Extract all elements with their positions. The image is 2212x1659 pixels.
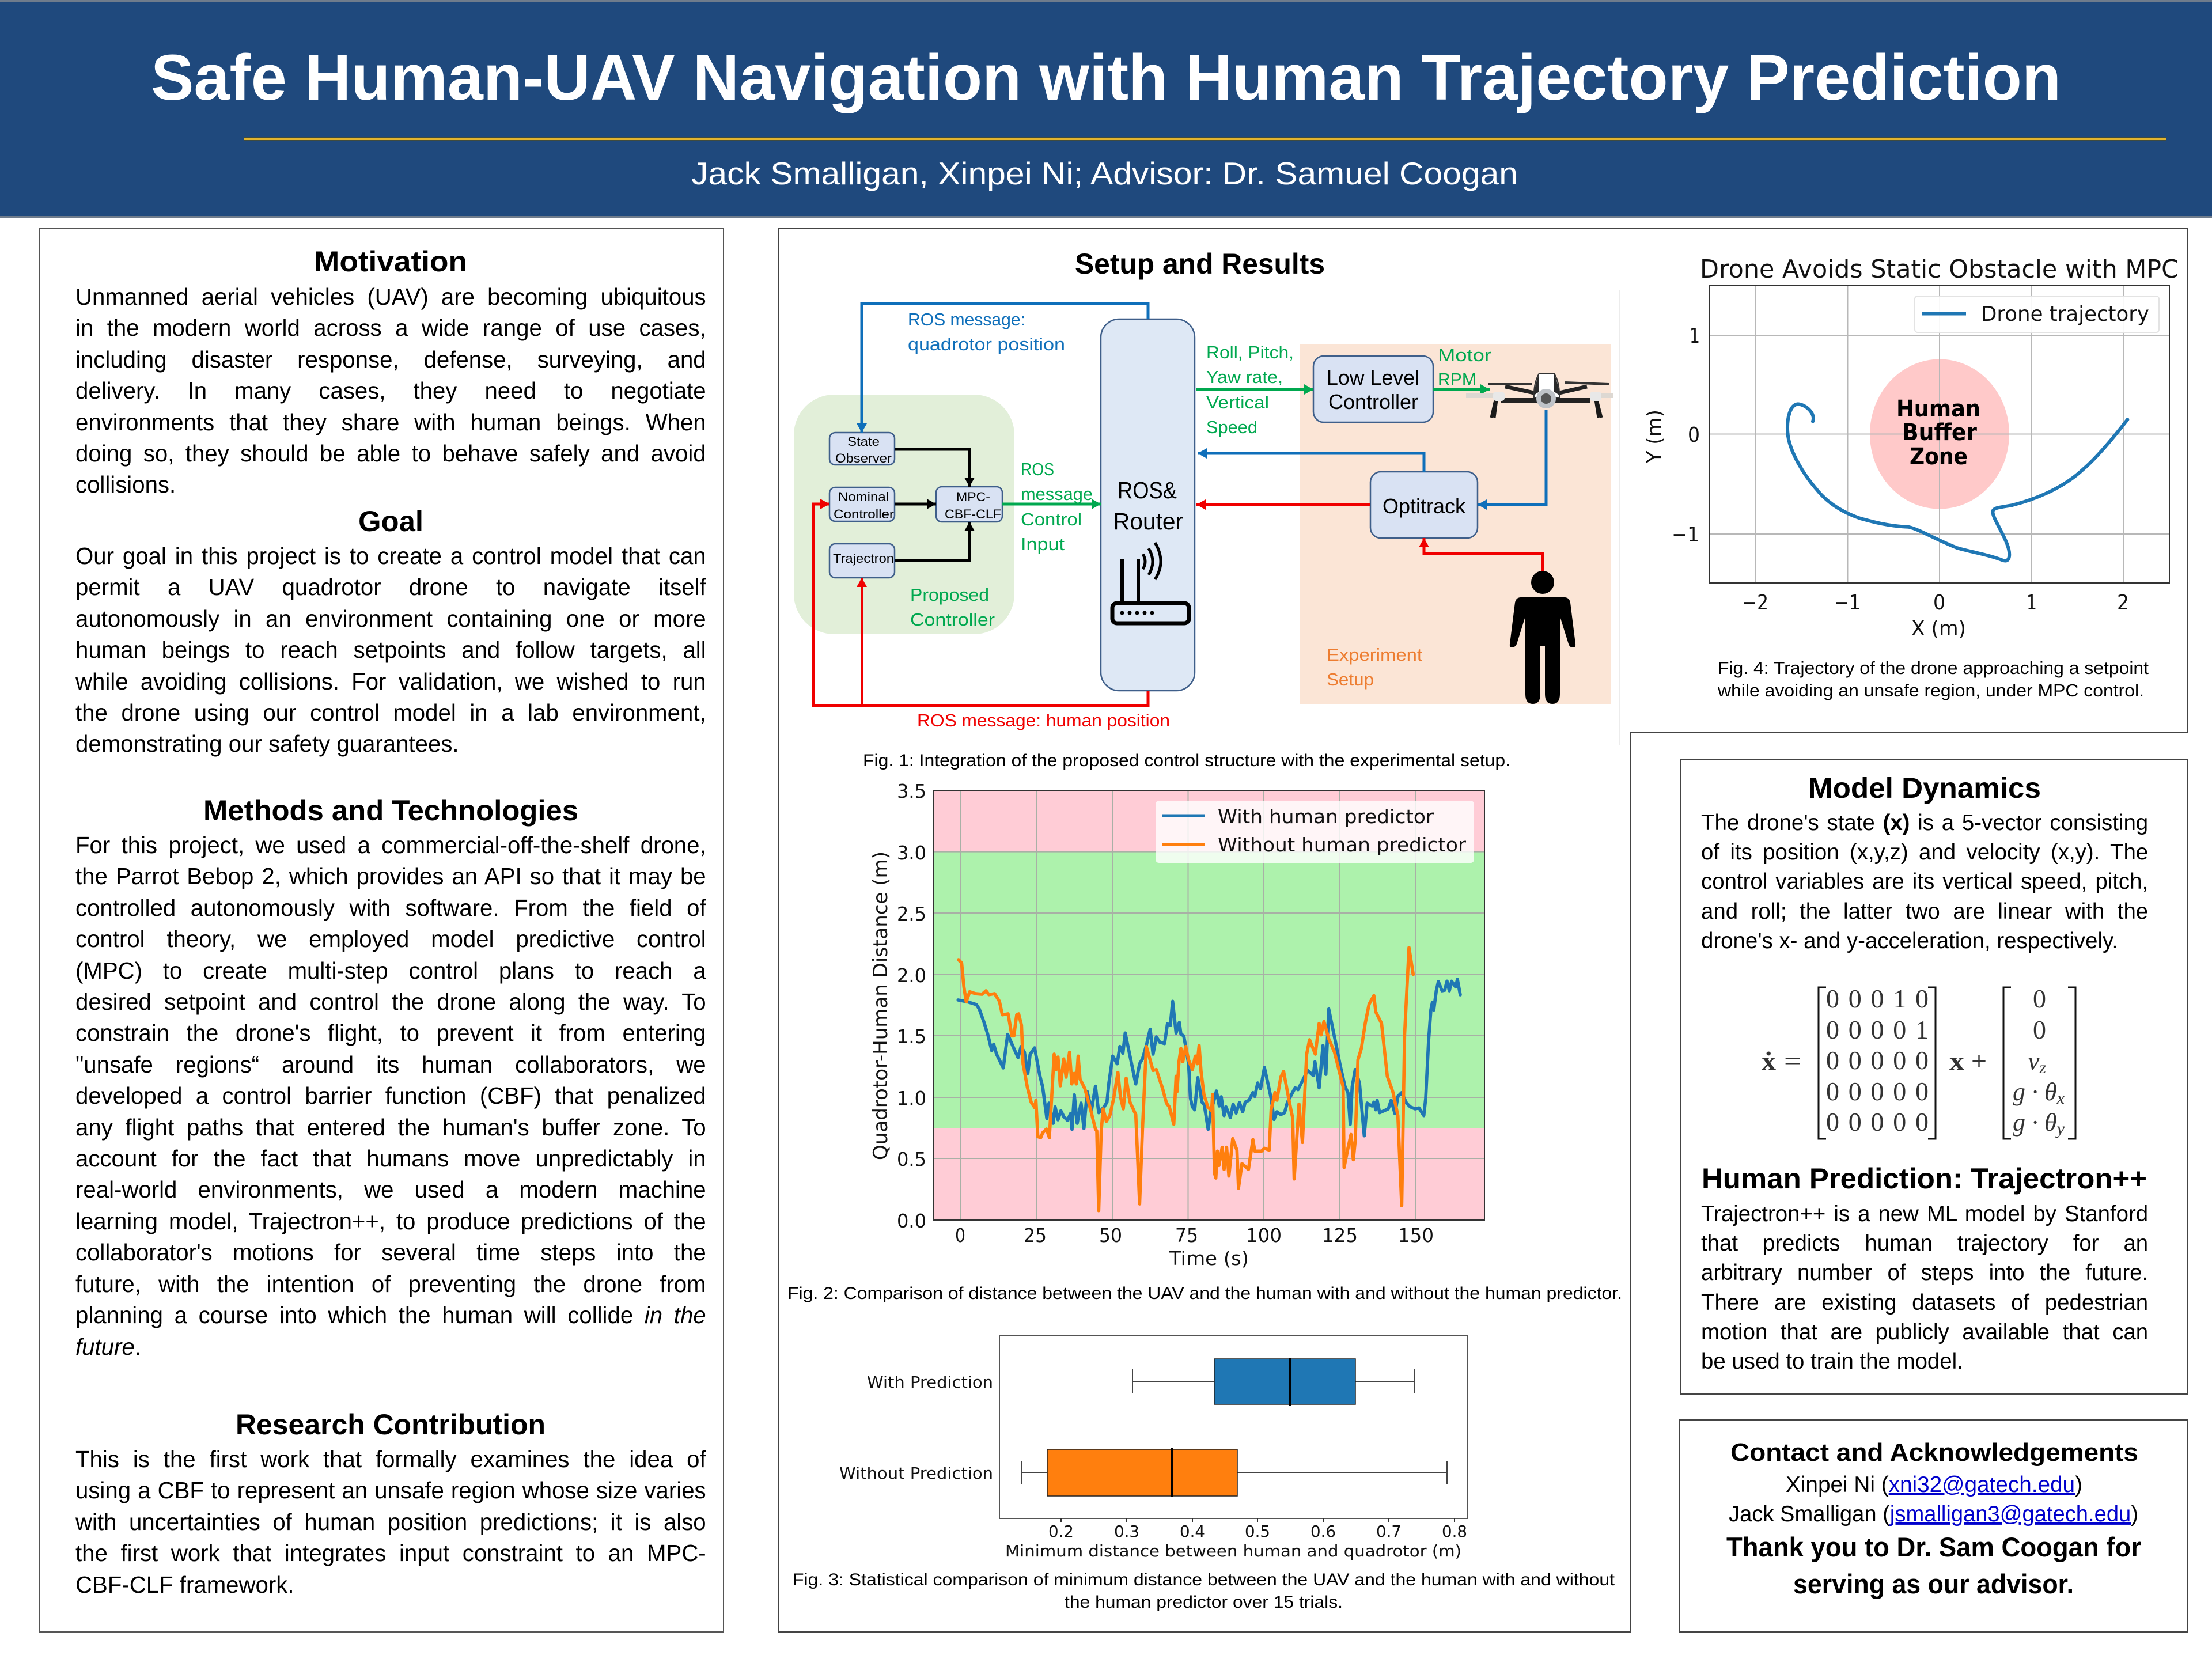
label: motor rpm: Motor bbox=[1438, 345, 1491, 365]
arrow: drone to optitrack bbox=[1478, 410, 1546, 505]
text block: goal: the drone using our control model in a lab environment, bbox=[75, 699, 706, 726]
text block: model dynamics: and roll; the latter two are linear with the bbox=[1701, 899, 2148, 924]
heading: methods and technologies: Methods and Technologies bbox=[203, 794, 578, 827]
text block: research contribution: with uncertainties of human position predictions; it is also bbox=[75, 1509, 706, 1535]
legend: Without human predictor bbox=[1218, 834, 1466, 856]
text block: model dynamics: control variables are its vertical speed, pitch, bbox=[1701, 869, 2148, 894]
label: motor rpm: RPM bbox=[1438, 369, 1476, 389]
equation: + bbox=[1971, 1046, 1987, 1075]
text block: methods and technologies: any flight paths that entered the human's buffer zone. To bbox=[75, 1114, 706, 1141]
text block: human prediction: be used to train the model. bbox=[1701, 1349, 1963, 1374]
text block: methods and technologies: (MPC) to create multi-step control plans to reach a bbox=[75, 957, 706, 984]
text block: goal: human beings to reach setpoints and follow targets, all bbox=[75, 637, 706, 663]
arrow: router to low level controller bbox=[1196, 388, 1313, 391]
y tick labels: 0.5 bbox=[897, 1148, 926, 1171]
text block: methods and technologies: developed a control barrier function (CBF) that penalized bbox=[75, 1082, 706, 1109]
arrow: optitrack to router red bbox=[1196, 503, 1370, 506]
y tick labels: −1 bbox=[1672, 523, 1699, 547]
thanks: serving as our advisor. bbox=[1793, 1569, 2074, 1599]
equation bbox=[1762, 984, 2075, 1139]
caption: fig 4 bbox=[1717, 658, 2149, 700]
text block: human prediction: arbitrary number of steps into the future. bbox=[1701, 1260, 2148, 1285]
caption: fig 1: Fig. 1: Integration of the proposed control structure with the experimental setup. bbox=[863, 751, 1510, 770]
box: optitrack bbox=[1370, 472, 1478, 538]
panel: experiment setup bbox=[1300, 344, 1611, 704]
box: state observer bbox=[830, 433, 895, 465]
vector entries: y bbox=[2055, 1119, 2065, 1138]
legend: Drone trajectory bbox=[1981, 302, 2149, 326]
text block: methods and technologies: collaborator's motions for several time steps into the bbox=[75, 1239, 706, 1266]
text block: model dynamics: drone's x- and y-acceleration, respectively. bbox=[1701, 929, 2118, 953]
text block: model dynamics bbox=[1701, 810, 2148, 953]
text block: human prediction: that predicts human trajectory for an bbox=[1701, 1231, 2148, 1256]
diagram: control structure bbox=[794, 304, 1613, 730]
matrix entries: 0 0 0 0 0 bbox=[1826, 1046, 1929, 1075]
heading: contact: Contact and Acknowledgements bbox=[1730, 1438, 2138, 1467]
zone label: Buffer bbox=[1902, 419, 1977, 446]
y tick labels: 1 bbox=[1690, 324, 1700, 348]
text block: motivation: including disaster response, defense, surveying, and bbox=[75, 346, 706, 373]
caption: fig 4: Fig. 4: Trajectory of the drone approaching a setpoint bbox=[1718, 658, 2149, 678]
label: roll pitch yaw bbox=[1206, 342, 1294, 437]
equation: = bbox=[1784, 1046, 1801, 1075]
heading: goal: Goal bbox=[358, 505, 423, 537]
box: ROS router: ROS& bbox=[1118, 477, 1177, 503]
panel: left column bbox=[40, 229, 724, 1632]
chart: distance over time bbox=[869, 780, 1484, 1270]
caption: fig 2: Fig. 2: Comparison of distance between the UAV and the human with and without the human predictor. bbox=[787, 1284, 1622, 1303]
label: quadrotor position: quadrotor position bbox=[908, 334, 1065, 354]
legend bbox=[1156, 801, 1474, 863]
text block: research contribution: using a CBF to represent an unsafe region whose size varies bbox=[75, 1477, 706, 1503]
text block: motivation: Unmanned aerial vehicles (UAV) are becoming ubiquitous bbox=[75, 283, 706, 310]
category labels: With Prediction bbox=[867, 1373, 993, 1392]
x tick labels: 0.4 bbox=[1180, 1522, 1205, 1541]
y tick labels: 0.0 bbox=[897, 1210, 926, 1232]
icon: human bbox=[1510, 571, 1575, 704]
box: optitrack: Optitrack bbox=[1382, 494, 1466, 518]
text block: motivation: doing so, they should be able to behave safely and avoid bbox=[75, 440, 706, 467]
x tick labels: 75 bbox=[1175, 1224, 1198, 1247]
text block: goal: Our goal in this project is to create a control model that can bbox=[75, 543, 706, 569]
label: proposed controller: Controller bbox=[910, 609, 995, 630]
box: nominal controller: Nominal bbox=[838, 490, 889, 504]
text block: human prediction: motion that are publicly available that can bbox=[1701, 1320, 2148, 1344]
label: motor rpm bbox=[1438, 345, 1491, 389]
matrix entries bbox=[1826, 984, 1929, 1137]
axis label: distance: Quadrotor-Human Distance (m) bbox=[869, 851, 892, 1160]
y tick labels bbox=[1672, 324, 1700, 547]
text block: human prediction: Trajectron++ is a new ML model by Stanford bbox=[1701, 1202, 2148, 1226]
label: ros message control input: ROS bbox=[1021, 459, 1054, 479]
axis label: time: Time (s) bbox=[1169, 1247, 1249, 1270]
human buffer zone bbox=[1870, 359, 2009, 509]
x tick labels: 125 bbox=[1322, 1224, 1358, 1247]
matrix entries: 0 0 0 1 0 bbox=[1826, 984, 1929, 1013]
x tick labels: 50 bbox=[1099, 1224, 1122, 1247]
box: without prediction bbox=[1021, 1448, 1447, 1497]
equation: x bbox=[1949, 1046, 1964, 1075]
label: proposed controller: Proposed bbox=[910, 585, 989, 605]
x tick labels: 0.3 bbox=[1114, 1522, 1139, 1541]
legend bbox=[1915, 296, 2159, 332]
box: low level controller: Controller bbox=[1328, 390, 1418, 414]
arrow: human to optitrack bbox=[1424, 538, 1543, 571]
gold divider bbox=[244, 137, 2166, 141]
x tick labels: 0.6 bbox=[1310, 1522, 1336, 1541]
vector entries: x bbox=[2056, 1089, 2065, 1108]
chart title: Drone Avoids Static Obstacle with MPC bbox=[1700, 255, 2179, 284]
box: with prediction bbox=[1132, 1358, 1415, 1406]
x tick labels: 2 bbox=[2117, 591, 2129, 615]
thanks bbox=[1726, 1532, 2141, 1599]
panel: setup and results bbox=[779, 229, 2188, 1632]
text block: model dynamics: The drone's state (x) is a 5-vector consisting bbox=[1701, 810, 2148, 835]
text block: motivation: delivery. In many cases, they need to negotiate bbox=[75, 377, 706, 404]
text block: goal: autonomously in an environment containing one or more bbox=[75, 605, 706, 632]
text block: methods and technologies: the Parrot Bebop 2, which provides an API so that it may be bbox=[75, 863, 706, 889]
text block: goal: permit a UAV quadrotor drone to navigate itself bbox=[75, 574, 706, 600]
box: trajectron bbox=[830, 544, 895, 578]
equation: ẋ bbox=[1762, 1046, 1776, 1075]
x tick labels bbox=[1742, 591, 2129, 615]
arrow: human position to trajectron bbox=[861, 578, 863, 706]
text block: methods and technologies: control theory, we employed model predictive control bbox=[75, 926, 706, 952]
header banner bbox=[0, 0, 2212, 218]
zone label: Zone bbox=[1910, 444, 1968, 470]
x tick labels bbox=[955, 1224, 1434, 1247]
vector entries: 0 bbox=[2033, 1015, 2046, 1044]
vector entries bbox=[2013, 984, 2065, 1138]
x tick labels: 25 bbox=[1024, 1224, 1047, 1247]
text block: methods and technologies: account for the fact that humans move unpredictably in bbox=[75, 1145, 706, 1172]
box: MPC-CBF-CLF: CBF-CLF bbox=[945, 507, 1001, 521]
x tick labels: 0.7 bbox=[1376, 1522, 1402, 1541]
box: low level controller bbox=[1313, 356, 1433, 422]
category labels bbox=[839, 1373, 993, 1483]
box: MPC-CBF-CLF: MPC- bbox=[956, 490, 990, 504]
text block: model dynamics: of its position (x,y,z) and velocity (x,y). The bbox=[1701, 840, 2148, 865]
label: experiment setup: Setup bbox=[1327, 669, 1374, 690]
matrix entries: 0 0 0 0 0 bbox=[1826, 1107, 1929, 1137]
vector entries: g · θ bbox=[2013, 1108, 2057, 1137]
x tick labels: 0.8 bbox=[1442, 1522, 1467, 1541]
label: proposed controller bbox=[910, 585, 995, 630]
text block: methods and technologies: learning model, Trajectron++, to produce predictions of the bbox=[75, 1208, 706, 1234]
arrow: state observer to MPC bbox=[895, 449, 969, 487]
caption: fig 3 bbox=[793, 1570, 1615, 1612]
x tick labels: 0.5 bbox=[1245, 1522, 1270, 1541]
label: roll pitch yaw: Roll, Pitch, bbox=[1206, 342, 1294, 362]
text block: motivation bbox=[75, 283, 706, 498]
panel: proposed controller bbox=[794, 395, 1014, 634]
text block: methods and technologies bbox=[75, 832, 706, 1359]
x tick labels: 100 bbox=[1246, 1224, 1282, 1247]
legend: With human predictor bbox=[1218, 805, 1434, 828]
panel: model dynamics bbox=[1680, 759, 2188, 1394]
arrow: human position to nominal controller bbox=[813, 504, 1148, 706]
label: roll pitch yaw: Speed bbox=[1206, 417, 1257, 437]
vector entries: v bbox=[2028, 1046, 2039, 1075]
caption: fig 3: Fig. 3: Statistical comparison of minimum distance between the UAV and the human with and without bbox=[793, 1570, 1615, 1589]
y tick labels: 2.5 bbox=[897, 903, 926, 925]
matrix entries: 0 0 0 0 1 bbox=[1826, 1015, 1929, 1044]
box: ROS router bbox=[1101, 319, 1195, 691]
x tick labels: −2 bbox=[1742, 591, 1768, 615]
arrow: motor rpm bbox=[1433, 388, 1490, 391]
arrow: trajectron to MPC bbox=[895, 522, 969, 560]
text block: methods and technologies: "unsafe regions“ around its human collaborators, we bbox=[75, 1051, 706, 1078]
vector entries: z bbox=[2039, 1058, 2046, 1077]
heading: motivation: Motivation bbox=[314, 245, 467, 278]
text block: goal: while avoiding collisions. For validation, we wished to run bbox=[75, 668, 706, 695]
text block: research contribution: This is the first work that formally examines the idea of bbox=[75, 1446, 706, 1472]
text block: human prediction bbox=[1701, 1202, 2148, 1374]
box: state observer: State bbox=[847, 434, 880, 449]
box: nominal controller: Controller bbox=[834, 507, 894, 521]
box: low level controller: Low Level bbox=[1327, 366, 1419, 389]
safety bands bbox=[934, 790, 1484, 1220]
label: ros message control input bbox=[1021, 459, 1093, 554]
series: with human predictor bbox=[958, 979, 1460, 1136]
zone label: Human bbox=[1896, 396, 1980, 422]
axis label: Minimum distance between human and quadrotor (m) bbox=[1005, 1541, 1461, 1560]
text block: methods and technologies: controlled autonomously with software. From the field of bbox=[75, 895, 706, 921]
y tick labels: 0 bbox=[1688, 423, 1700, 447]
text block: methods and technologies: future, with the intention of preventing the drone from bbox=[75, 1271, 706, 1297]
box: ROS router: Router bbox=[1113, 508, 1183, 535]
box: MPC-CBF-CLF bbox=[936, 487, 1002, 522]
label: ros message control input: Control bbox=[1021, 509, 1082, 529]
text block: goal bbox=[75, 543, 706, 757]
label: experiment setup bbox=[1327, 645, 1422, 690]
x tick labels: 1 bbox=[2027, 591, 2037, 615]
arrow: optitrack to router blue bbox=[1198, 453, 1424, 472]
label: experiment setup: Experiment bbox=[1327, 645, 1422, 665]
contact: xinpei ni: Xinpei Ni (xni32@gatech.edu) bbox=[1786, 1472, 2082, 1497]
x tick labels bbox=[1048, 1522, 1467, 1541]
heading: setup and results: Setup and Results bbox=[1075, 248, 1325, 280]
x tick labels: 150 bbox=[1398, 1224, 1434, 1247]
drone trajectory line bbox=[1787, 404, 2127, 560]
arrow: control input bbox=[1002, 502, 1101, 506]
heading: human prediction: Human Prediction: Trajectron++ bbox=[1702, 1162, 2147, 1195]
zone label bbox=[1896, 396, 1980, 470]
chart: minimum distance boxplot bbox=[839, 1335, 1468, 1560]
box: state observer: Observer bbox=[835, 451, 892, 465]
text block: motivation: collisions. bbox=[75, 471, 176, 498]
label: human position: ROS message: human position bbox=[917, 710, 1170, 730]
y tick labels: 3.0 bbox=[897, 842, 926, 864]
label: roll pitch yaw: Yaw rate, bbox=[1206, 367, 1283, 387]
matrix entries: 0 0 0 0 0 bbox=[1826, 1077, 1929, 1106]
box: trajectron: Trajectron bbox=[833, 551, 894, 566]
label: ros message control input: message bbox=[1021, 484, 1093, 504]
y tick labels: 1.5 bbox=[897, 1025, 926, 1048]
label: roll pitch yaw: Vertical bbox=[1206, 392, 1269, 412]
arrow: nominal controller to MPC bbox=[895, 502, 936, 506]
axis label: y: Y (m) bbox=[1643, 410, 1666, 464]
text block: research contribution: the first work that integrates input constraint to an MPC- bbox=[75, 1540, 706, 1566]
text block: methods and technologies: real-world environments, we used a modern machine bbox=[75, 1176, 706, 1203]
y tick labels bbox=[897, 780, 926, 1232]
contact: jack smalligan: Jack Smalligan (jsmalligan3@gatech.edu) bbox=[1729, 1502, 2138, 1527]
y tick labels: 1.0 bbox=[897, 1087, 926, 1109]
axis label: x: X (m) bbox=[1911, 617, 1966, 641]
icon: drone bbox=[1466, 373, 1613, 418]
text block: research contribution: CBF-CLF framework. bbox=[75, 1571, 294, 1598]
x tick labels: 0.2 bbox=[1048, 1522, 1074, 1541]
caption: fig 4: while avoiding an unsafe region, under MPC control. bbox=[1717, 680, 2144, 700]
text block: methods and technologies: future. bbox=[75, 1333, 141, 1359]
vector entries: g · θ bbox=[2013, 1078, 2057, 1106]
label: quadrotor position bbox=[908, 309, 1065, 354]
thanks: Thank you to Dr. Sam Coogan for bbox=[1726, 1532, 2141, 1562]
text block: motivation: environments that they share with human beings. When bbox=[75, 409, 706, 435]
x tick labels: 0 bbox=[1933, 591, 1945, 615]
text block: methods and technologies: For this project, we used a commercial-off-the-shelf drone, bbox=[75, 832, 706, 858]
x tick labels: 0 bbox=[955, 1224, 965, 1247]
box: nominal controller bbox=[830, 487, 895, 521]
label: quadrotor position: ROS message: bbox=[908, 309, 1025, 329]
authors: Jack Smalligan, Xinpei Ni; Advisor: Dr. Samuel Coogan bbox=[691, 156, 1518, 191]
text block: goal: demonstrating our safety guarantees. bbox=[75, 730, 459, 757]
text block: human prediction: There are existing datasets of pedestrian bbox=[1701, 1290, 2148, 1315]
text block: methods and technologies: desired setpoint and control the drone along the way. To bbox=[75, 988, 706, 1015]
vector entries: 0 bbox=[2033, 984, 2046, 1013]
y tick labels: 2.0 bbox=[897, 964, 926, 987]
heading: model dynamics: Model Dynamics bbox=[1808, 772, 2041, 804]
caption: fig 3: the human predictor over 15 trials. bbox=[1065, 1593, 1343, 1612]
chart: drone trajectory bbox=[1643, 255, 2179, 641]
panel: contact and acknowledgements bbox=[1679, 1420, 2188, 1632]
arrow: quadrotor position to state observer bbox=[862, 304, 1148, 433]
title: Safe Human-UAV Navigation with Human Trajectory Prediction bbox=[151, 41, 2061, 113]
text block: motivation: in the modern world across a wide range of use cases, bbox=[75, 315, 706, 341]
icon: wifi router bbox=[1112, 543, 1189, 623]
heading: research contribution: Research Contribution bbox=[236, 1408, 546, 1441]
text block: research contribution bbox=[75, 1446, 706, 1598]
series: without human predictor bbox=[959, 948, 1413, 1211]
label: ros message control input: Input bbox=[1021, 534, 1065, 554]
x tick labels: −1 bbox=[1834, 591, 1861, 615]
category labels: Without Prediction bbox=[839, 1464, 993, 1483]
y tick labels: 3.5 bbox=[897, 780, 926, 802]
text block: methods and technologies: planning a course into which the human will collide in the bbox=[75, 1302, 706, 1328]
text block: methods and technologies: constrain the drone's flight, to prevent it from entering bbox=[75, 1020, 706, 1046]
